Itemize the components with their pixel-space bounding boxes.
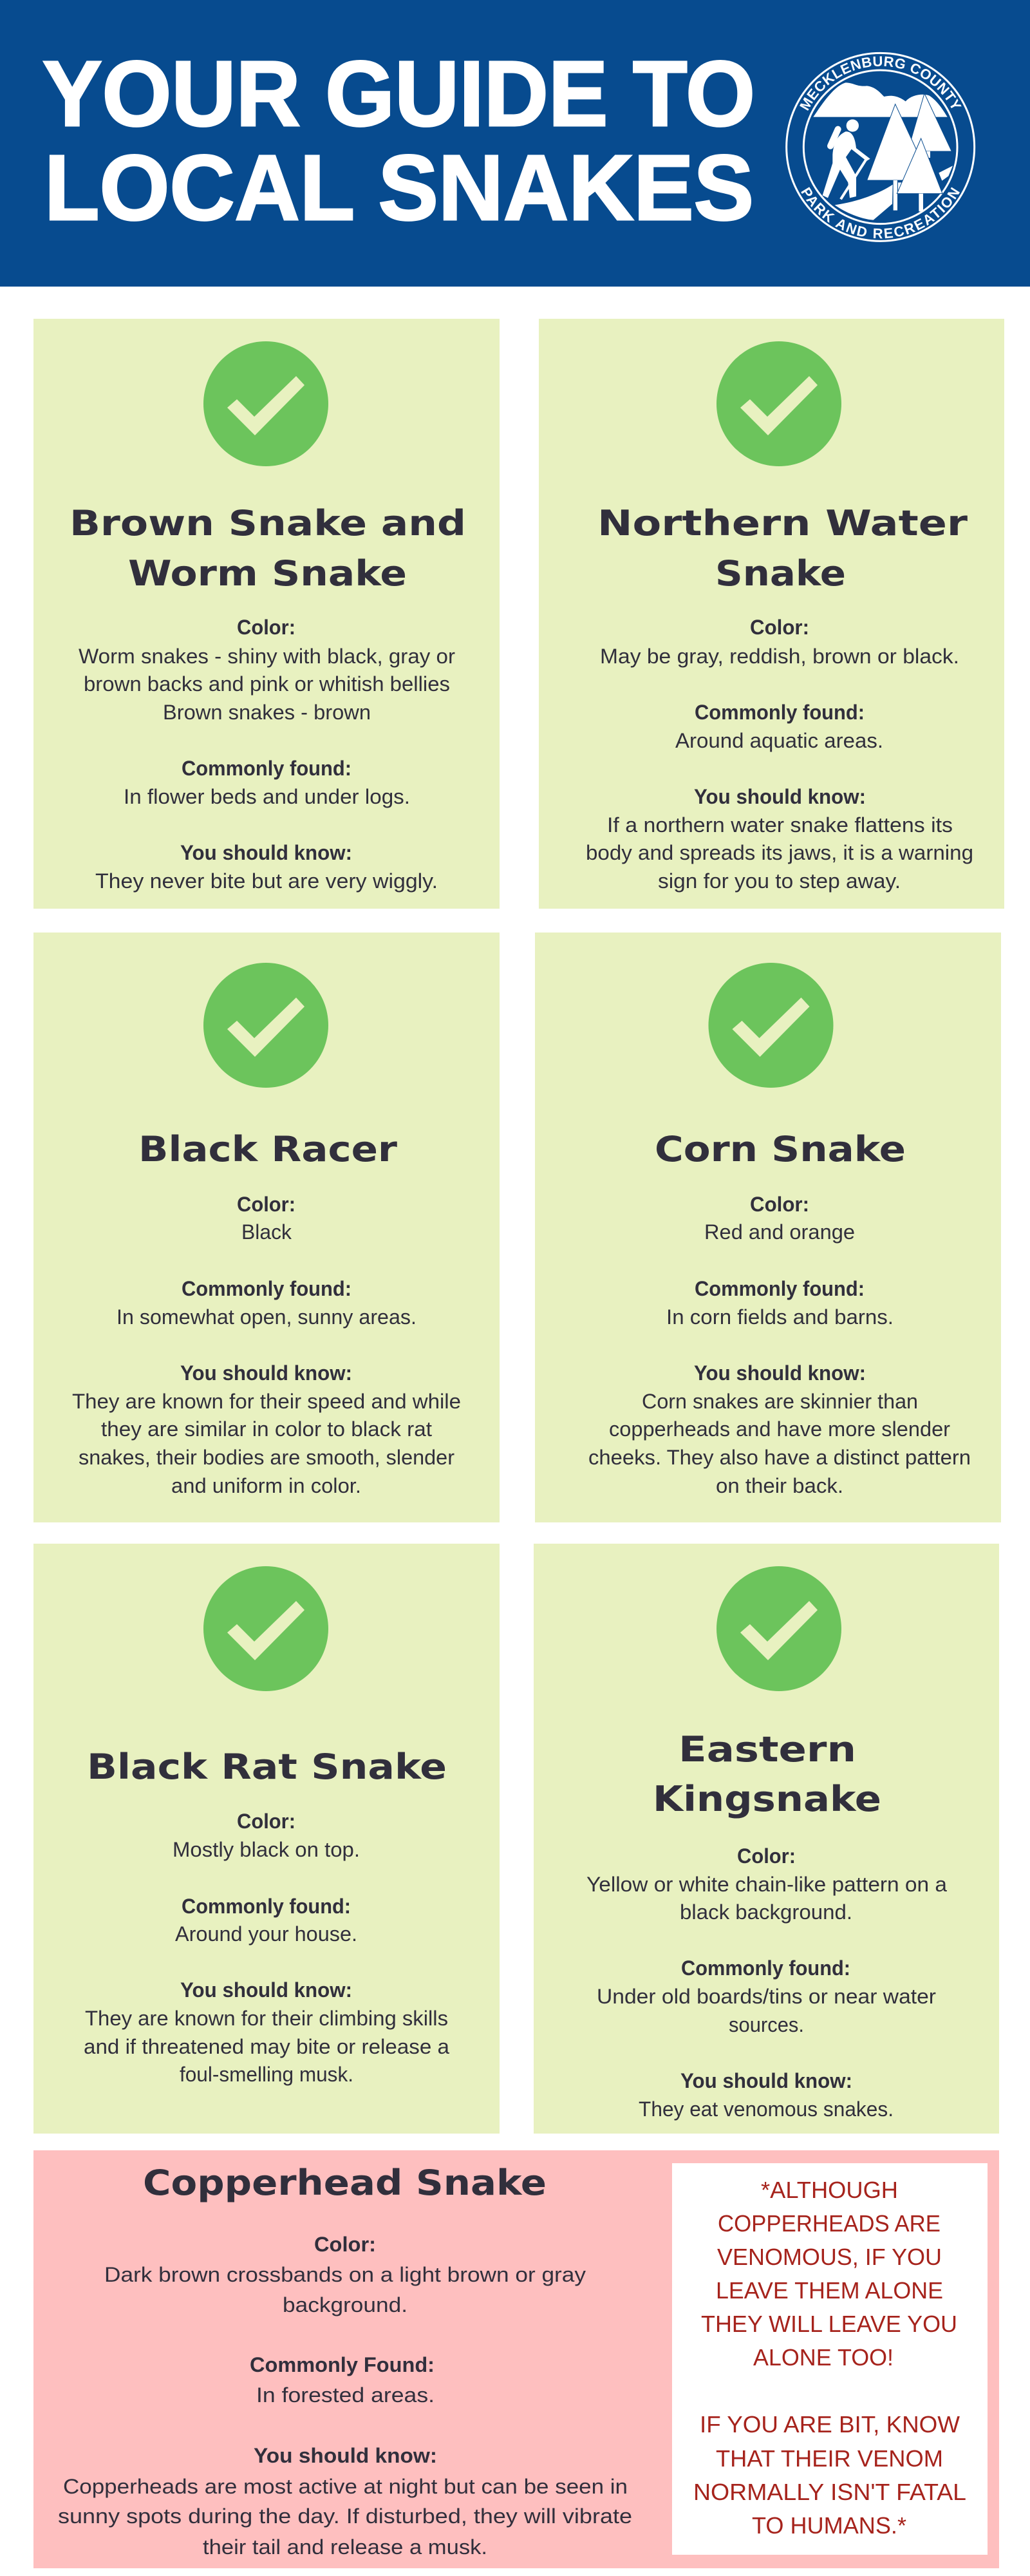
text block: Mostly black on top. — [173, 1838, 360, 1861]
text block: sunny spots during the day. If disturbed, they will vibrate — [58, 2505, 632, 2528]
callout: venom warning: THEY WILL LEAVE YOU — [701, 2311, 957, 2337]
panel: Copperhead Snake — [33, 2150, 999, 2568]
text block: They eat venomous snakes. — [639, 2098, 894, 2121]
text block: cheeks. They also have a distinct pattern — [588, 1446, 971, 1469]
text block: Copperheads are most active at night but can be seen in — [63, 2475, 628, 2498]
title: LOCAL SNAKES — [44, 136, 754, 240]
heading: Snake — [715, 553, 846, 594]
callout: venom warning: ALONE TOO! — [753, 2344, 894, 2371]
text block: You should know: — [180, 841, 352, 864]
text block: Color: — [314, 2233, 376, 2256]
text block: Commonly found: — [182, 1277, 351, 1300]
callout: venom warning: NORMALLY ISN'T FATAL — [693, 2479, 966, 2505]
text block: they are similar in color to black rat — [101, 1417, 432, 1441]
text block: Commonly found: — [182, 1895, 351, 1918]
text block: sign for you to step away. — [658, 869, 901, 893]
text block: Brown snakes - brown — [163, 701, 371, 724]
callout: venom warning: THAT THEIR VENOM — [716, 2445, 943, 2472]
panel: Corn Snake — [535, 933, 1001, 1522]
text block: In somewhat open, sunny areas. — [117, 1305, 417, 1329]
heading: Black Racer — [138, 1129, 397, 1170]
text block: Worm snakes - shiny with black, gray or — [79, 645, 455, 668]
icon: check mark — [203, 1566, 328, 1691]
icon: check mark — [203, 963, 328, 1088]
text block: Color: — [737, 1844, 796, 1868]
text block: background. — [283, 2293, 407, 2316]
text block: Color: — [237, 1193, 295, 1216]
text block — [586, 1844, 947, 2121]
text block: Commonly found: — [681, 1956, 850, 1980]
callout: venom warning: *ALTHOUGH — [761, 2177, 898, 2203]
text block — [79, 616, 455, 893]
logo: Mecklenburg County Park and Recreation — [785, 52, 976, 242]
text block: Color: — [750, 616, 809, 639]
text block: Color: — [237, 616, 295, 639]
text block: Dark brown crossbands on a light brown or gray — [104, 2263, 586, 2286]
text block: Black — [241, 1220, 292, 1244]
text block: Color: — [750, 1193, 809, 1216]
text block: Commonly found: — [182, 757, 351, 780]
text block: You should know: — [694, 785, 866, 808]
text block: body and spreads its jaws, it is a warning — [586, 841, 973, 864]
panel: Black Racer — [33, 933, 500, 1522]
logo: Mecklenburg County Park and Recreation: PARK AND RECREATION — [801, 187, 960, 238]
panel: Brown Snake and Worm Snake — [33, 319, 500, 909]
title: YOUR GUIDE TO — [42, 42, 755, 146]
text block: Commonly found: — [695, 701, 865, 724]
text block: copperheads and have more slender — [609, 1417, 950, 1441]
title — [42, 42, 755, 240]
text block: You should know: — [180, 1978, 352, 2002]
text block: In forested areas. — [256, 2383, 435, 2407]
callout: venom warning — [672, 2163, 988, 2555]
text block: foul-smelling musk. — [180, 2063, 353, 2086]
heading — [597, 503, 968, 594]
text block: brown backs and pink or whitish bellies — [84, 672, 450, 696]
text block: In corn fields and barns. — [666, 1305, 894, 1329]
callout: venom warning: LEAVE THEM ALONE — [716, 2277, 943, 2304]
text block: snakes, their bodies are smooth, slender — [79, 1446, 454, 1469]
heading: Worm Snake — [128, 553, 407, 594]
text block: black background. — [680, 1900, 852, 1924]
text block: Red and orange — [704, 1220, 855, 1244]
heading: Copperhead Snake — [143, 2163, 547, 2203]
text block: Color: — [237, 1810, 295, 1833]
text block: You should know: — [180, 1361, 352, 1385]
text block: They are known for their speed and while — [72, 1390, 461, 1413]
header banner — [0, 0, 1030, 287]
text block: Around your house. — [175, 1922, 357, 1946]
text block: May be gray, reddish, brown or black. — [600, 645, 959, 668]
text block: They are known for their climbing skills — [85, 2007, 448, 2030]
text block: and uniform in color. — [171, 1474, 361, 1497]
text block: You should know: — [694, 1361, 866, 1385]
icon: check mark — [716, 341, 841, 466]
text block: You should know: — [680, 2069, 852, 2092]
text block: If a northern water snake flattens its — [607, 813, 953, 837]
text block: You should know: — [254, 2444, 437, 2467]
text block: Corn snakes are skinnier than — [642, 1390, 918, 1413]
text block: They never bite but are very wiggly. — [95, 869, 438, 893]
heading: Black Rat Snake — [87, 1747, 447, 1787]
heading: Northern Water — [597, 503, 968, 544]
text block: on their back. — [716, 1474, 843, 1497]
text block: Around aquatic areas. — [675, 729, 883, 752]
text block — [586, 616, 973, 893]
heading — [653, 1729, 881, 1819]
text block — [72, 1193, 461, 1497]
panel: Northern Water Snake — [539, 319, 1004, 909]
callout: venom warning: IF YOU ARE BIT, KNOW — [700, 2411, 960, 2438]
text block: sources. — [729, 2013, 804, 2036]
icon: check mark — [708, 963, 833, 1088]
panel: Black Rat Snake — [33, 1544, 500, 2134]
icon: check mark — [716, 1566, 841, 1691]
logo: Mecklenburg County Park and Recreation: MECKLENBURG COUNTY — [800, 56, 962, 111]
heading: Brown Snake and — [70, 503, 466, 544]
heading: Corn Snake — [655, 1129, 906, 1170]
text block: and if threatened may bite or release a — [84, 2035, 449, 2058]
text block — [588, 1193, 971, 1497]
text block: Yellow or white chain-like pattern on a — [586, 1873, 947, 1896]
text block: Commonly Found: — [250, 2353, 435, 2376]
text block — [58, 2233, 632, 2559]
panel: Eastern Kingsnake — [534, 1544, 999, 2134]
text block: Commonly found: — [695, 1277, 865, 1300]
text block: In flower beds and under logs. — [124, 785, 410, 808]
callout: venom warning: VENOMOUS, IF YOU — [717, 2244, 942, 2270]
text block: Under old boards/tins or near water — [597, 1985, 936, 2008]
callout: venom warning: TO HUMANS.* — [752, 2512, 906, 2539]
callout: venom warning: COPPERHEADS ARE — [718, 2210, 941, 2237]
heading: Eastern — [679, 1729, 856, 1770]
text block — [84, 1810, 449, 2086]
icon: check mark — [203, 341, 328, 466]
heading: Kingsnake — [653, 1779, 881, 1819]
text block: their tail and release a musk. — [203, 2535, 487, 2559]
heading — [70, 503, 466, 594]
